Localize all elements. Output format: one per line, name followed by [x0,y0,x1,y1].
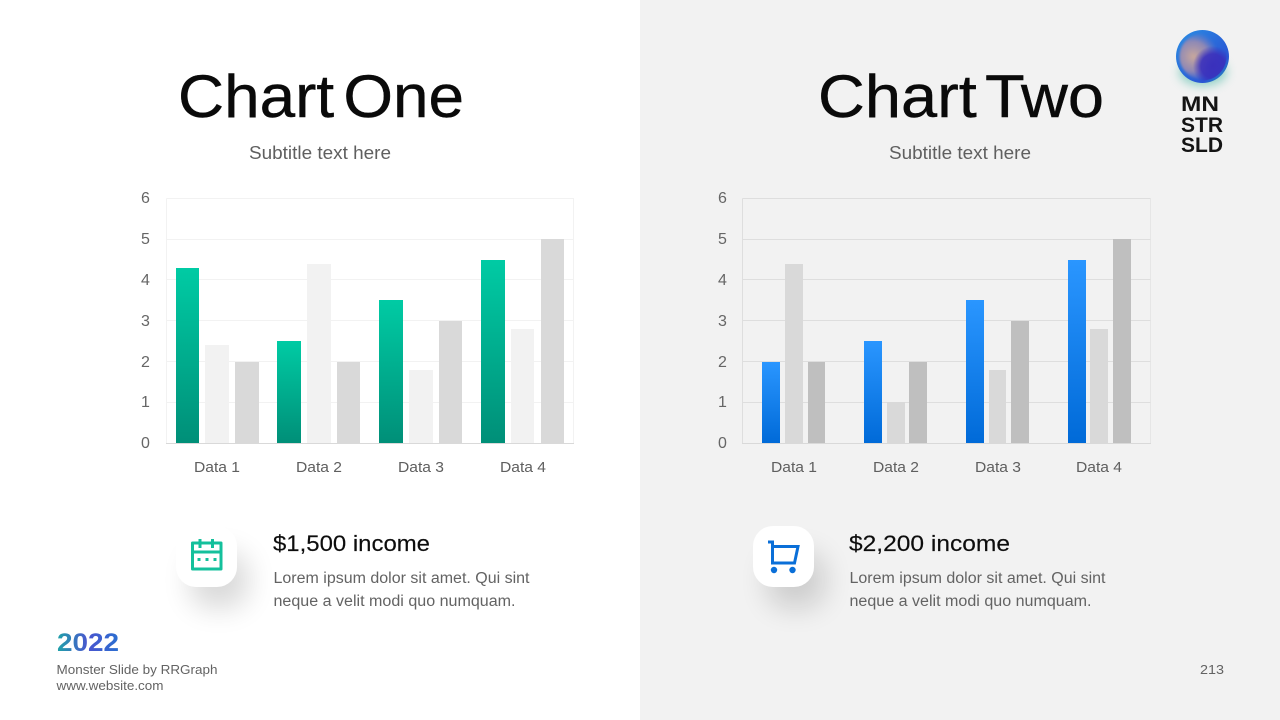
footer text [55,662,217,693]
footer text: www.website.com [55,678,163,693]
text block: income two: neque a velit modi quo numquam. [850,593,1092,610]
logo text: STR [1181,114,1223,137]
text block: income one: neque a velit modi quo numquam. [274,593,516,610]
text block: income one: $1,500 income [273,531,430,556]
subtitle: chart one: Subtitle text here [249,142,391,163]
logo text: MN [1181,93,1219,116]
bar chart: chart two: 5 [718,231,727,248]
bar chart: chart one: 3 [141,313,150,330]
text block: income one: Lorem ipsum dolor sit amet. Qui sint [274,570,530,587]
year: 2022 [57,629,119,657]
icon: shopping cart [753,526,825,608]
logo text: SLD [1181,134,1223,157]
title: Chart One: Chart One [178,63,464,130]
icon: gradient orb [1176,30,1229,86]
bar chart: chart one: 2 [141,354,150,371]
bar chart: chart one: 1 [141,394,150,411]
text block: income two [849,531,1106,610]
bar chart: chart two: 2 [718,354,727,371]
title: Chart Two: Chart Two [818,63,1104,130]
bar chart: chart one: Data 2 [296,460,342,476]
bar chart: chart two: Data 1 [771,460,817,476]
bar chart: chart two: 3 [718,313,727,330]
bar chart: chart two: Data 4 [1076,460,1122,476]
footer: branding [55,629,217,693]
bar chart: chart one: Data 3 [398,460,444,476]
text block: income two: $2,200 income [849,531,1010,556]
bar chart: chart two: 4 [718,272,727,289]
bar chart: chart one: 5 [141,231,150,248]
bar chart: chart two: 6 [718,190,727,207]
text block: income two: Lorem ipsum dolor sit amet. Qui sint [850,570,1106,587]
bar chart: chart one: Data 4 [500,460,546,476]
bar chart: chart two: 1 [718,394,727,411]
bar chart: chart one [141,190,574,476]
bar chart: chart two: Data 3 [975,460,1021,476]
icon: calendar [176,526,248,608]
bar chart: chart one: 4 [141,272,150,289]
logo [1176,30,1229,157]
bar chart: chart two: Data 2 [873,460,919,476]
subtitle: chart two: Subtitle text here [889,142,1031,163]
footer text: Monster Slide by RRGraph [56,662,218,677]
page number: 213 [1200,662,1224,677]
bar chart: chart one: 6 [141,190,150,207]
bar chart: chart two: 0 [718,435,727,452]
panel: chart two [718,63,1151,610]
panel: chart one [141,63,574,610]
text block: income one [273,531,530,610]
bar chart: chart one: 0 [141,435,150,452]
logo text [1181,93,1223,157]
panel: right background [640,0,1280,720]
bar chart: chart one: Data 1 [194,460,240,476]
bar chart: chart two [718,190,1151,476]
